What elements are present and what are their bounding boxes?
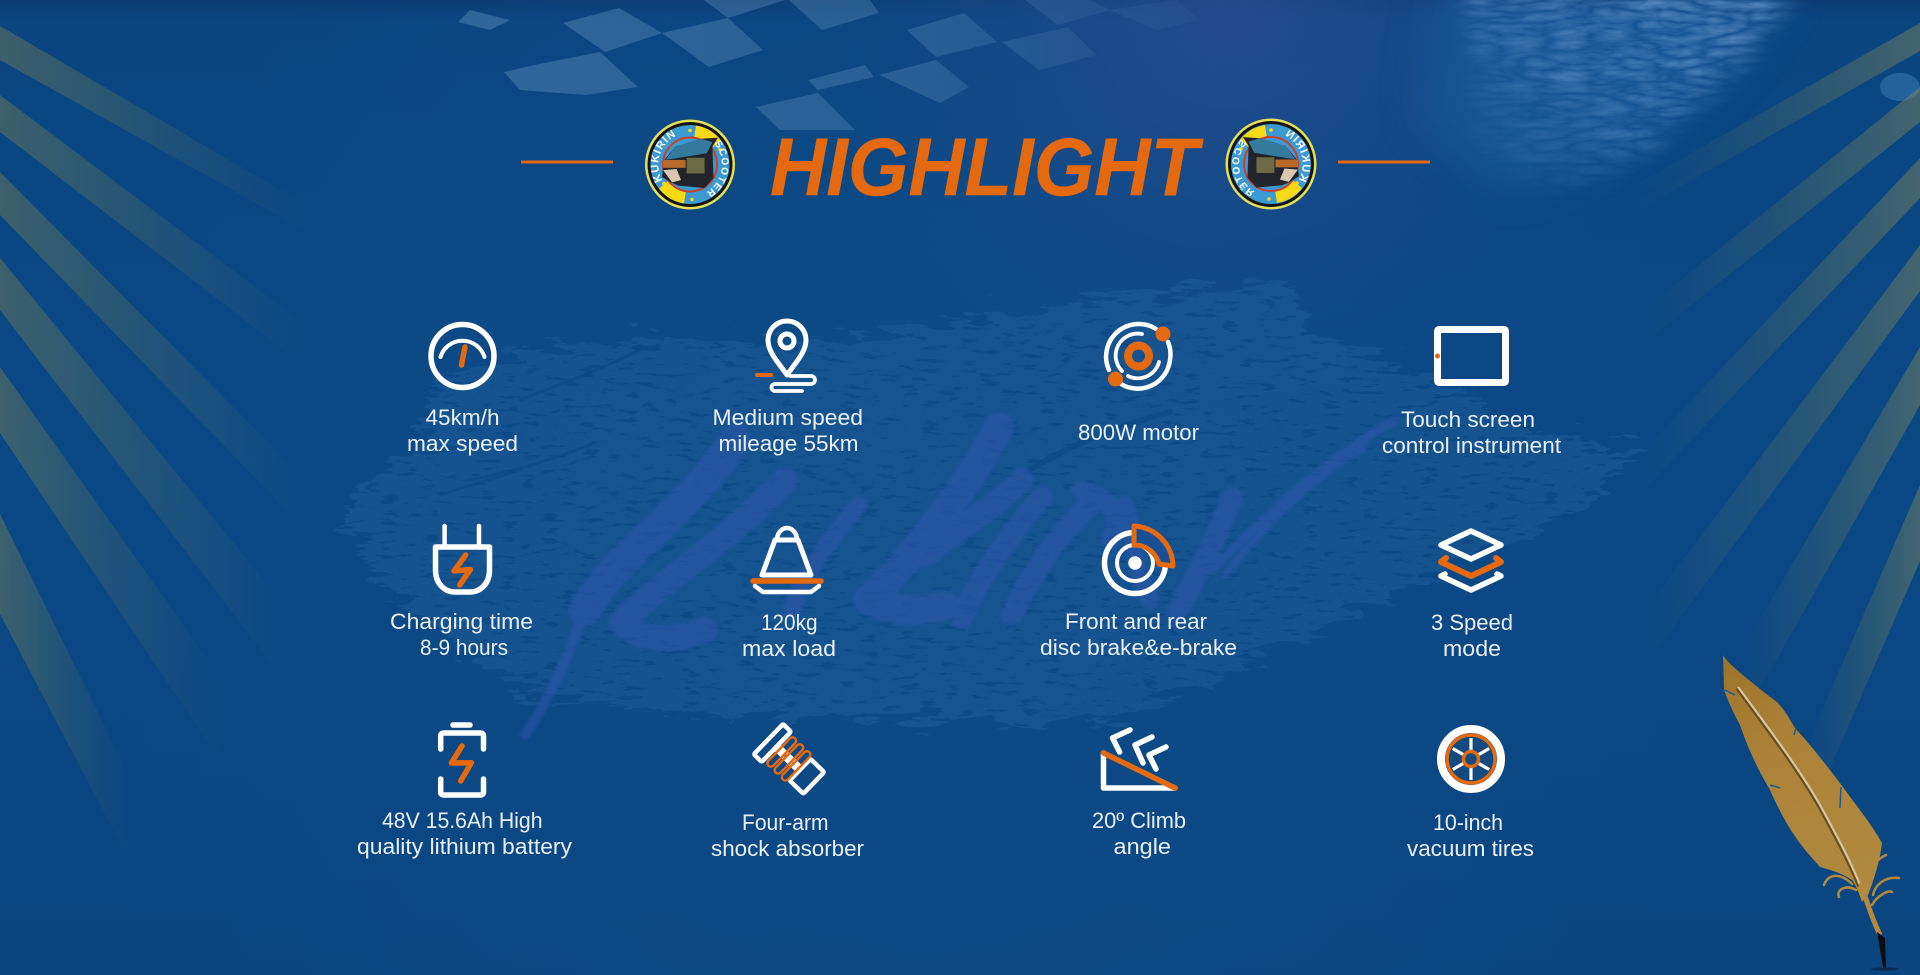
text: front and rear disc brake and e-brake: Front and rear <box>1065 609 1207 634</box>
text: charging time 8-9 hours: 8-9 hours <box>420 635 508 660</box>
text: touch screen control instrument: Touch screen <box>1401 407 1535 432</box>
icon: speedometer <box>431 324 494 388</box>
text: 3 speed mode: 3 Speed <box>1431 610 1513 635</box>
text: 20 degree climb angle: angle <box>1114 834 1171 859</box>
feature: brakes <box>1040 526 1237 660</box>
feature: charging time <box>390 526 533 660</box>
text: 800W motor: 800W motor <box>1078 420 1199 445</box>
text: 3 speed mode: mode <box>1443 636 1501 661</box>
text: battery spec: 48V 15.6Ah High <box>382 808 542 833</box>
background: right light rays <box>1600 23 1920 860</box>
icon: motor rings <box>1106 324 1170 389</box>
text: 45km/h max speed: 45km/h <box>426 405 500 430</box>
illustration: golden feather quill <box>1723 655 1899 971</box>
icon: wheel <box>1441 729 1501 789</box>
text: 20 degree climb angle: 20º Climb <box>1092 808 1186 833</box>
text: medium speed mileage 55km: mileage 55km <box>718 431 858 456</box>
icon: plug <box>436 526 490 592</box>
text: 45km/h max speed <box>407 405 518 456</box>
feature: tires <box>1407 729 1534 861</box>
icon: battery <box>441 725 484 795</box>
text: four-arm shock absorber <box>711 810 864 861</box>
text: front and rear disc brake and e-brake: disc brake&e-brake <box>1040 635 1237 660</box>
feature: max load <box>742 528 836 661</box>
logo: left helmet badge: SCOOTER <box>706 140 729 196</box>
text: touch screen control instrument <box>1382 407 1561 458</box>
text: four-arm shock absorber: Four-arm <box>742 810 828 835</box>
logo: left helmet badge: KUKIRIN <box>650 130 676 183</box>
icon: shock absorber <box>754 724 828 798</box>
text: 45km/h max speed: max speed <box>407 431 518 456</box>
background: rippled water texture <box>1426 0 1920 187</box>
text: medium speed mileage 55km <box>712 405 863 456</box>
title: HIGHLIGHT <box>770 122 1204 213</box>
logo: right helmet badge <box>1226 118 1316 210</box>
text: front and rear disc brake and e-brake <box>1040 609 1237 660</box>
background: checkered flag <box>458 0 1200 130</box>
logo: right helmet badge: SCOOTER <box>1232 140 1254 196</box>
title: decorative line left <box>521 160 613 164</box>
text: battery spec <box>357 808 572 859</box>
icon: map pin with road <box>757 321 815 391</box>
logo: left helmet badge <box>645 120 735 210</box>
text: 120kg max load: 120kg <box>761 610 818 635</box>
background: brush stroke <box>340 280 1640 725</box>
icon: brake disc <box>1104 526 1173 594</box>
feature: climb angle <box>1092 730 1186 859</box>
text: four-arm shock absorber: shock absorber <box>711 836 864 861</box>
feature: mileage <box>712 321 863 456</box>
text: 10-inch vacuum tires: 10-inch <box>1433 810 1503 835</box>
icon: weight on scale <box>753 528 821 592</box>
logo: right helmet badge: KUKIRIN <box>1286 129 1310 182</box>
text: charging time 8-9 hours: Charging time <box>390 609 533 634</box>
feature: motor <box>1078 324 1199 445</box>
text: 120kg max load: max load <box>742 636 836 661</box>
feature: touch screen <box>1382 330 1561 458</box>
background: left light rays <box>0 26 340 900</box>
text: 20 degree climb angle <box>1092 808 1186 859</box>
background: brush dark streaks <box>440 350 1170 495</box>
icon: stacked layers <box>1441 531 1501 590</box>
feature: battery <box>357 725 572 859</box>
feature: speed modes <box>1431 531 1513 661</box>
text: battery spec: quality lithium battery <box>357 834 572 859</box>
text: touch screen control instrument: control instrument <box>1382 433 1561 458</box>
icon: tablet <box>1435 330 1506 382</box>
icon: ramp with chevrons <box>1104 730 1175 788</box>
background: script watermark <box>525 420 1395 735</box>
text: 10-inch vacuum tires: vacuum tires <box>1407 836 1534 861</box>
feature: max speed <box>407 324 518 456</box>
text: 120kg max load <box>742 610 836 661</box>
feature: shock absorber <box>711 724 864 861</box>
text: 10-inch vacuum tires <box>1407 810 1534 861</box>
title: decorative line right <box>1338 160 1430 164</box>
text: charging time 8-9 hours <box>390 609 533 660</box>
text: medium speed mileage 55km: Medium speed <box>712 405 863 430</box>
text: 3 speed mode <box>1431 610 1513 661</box>
